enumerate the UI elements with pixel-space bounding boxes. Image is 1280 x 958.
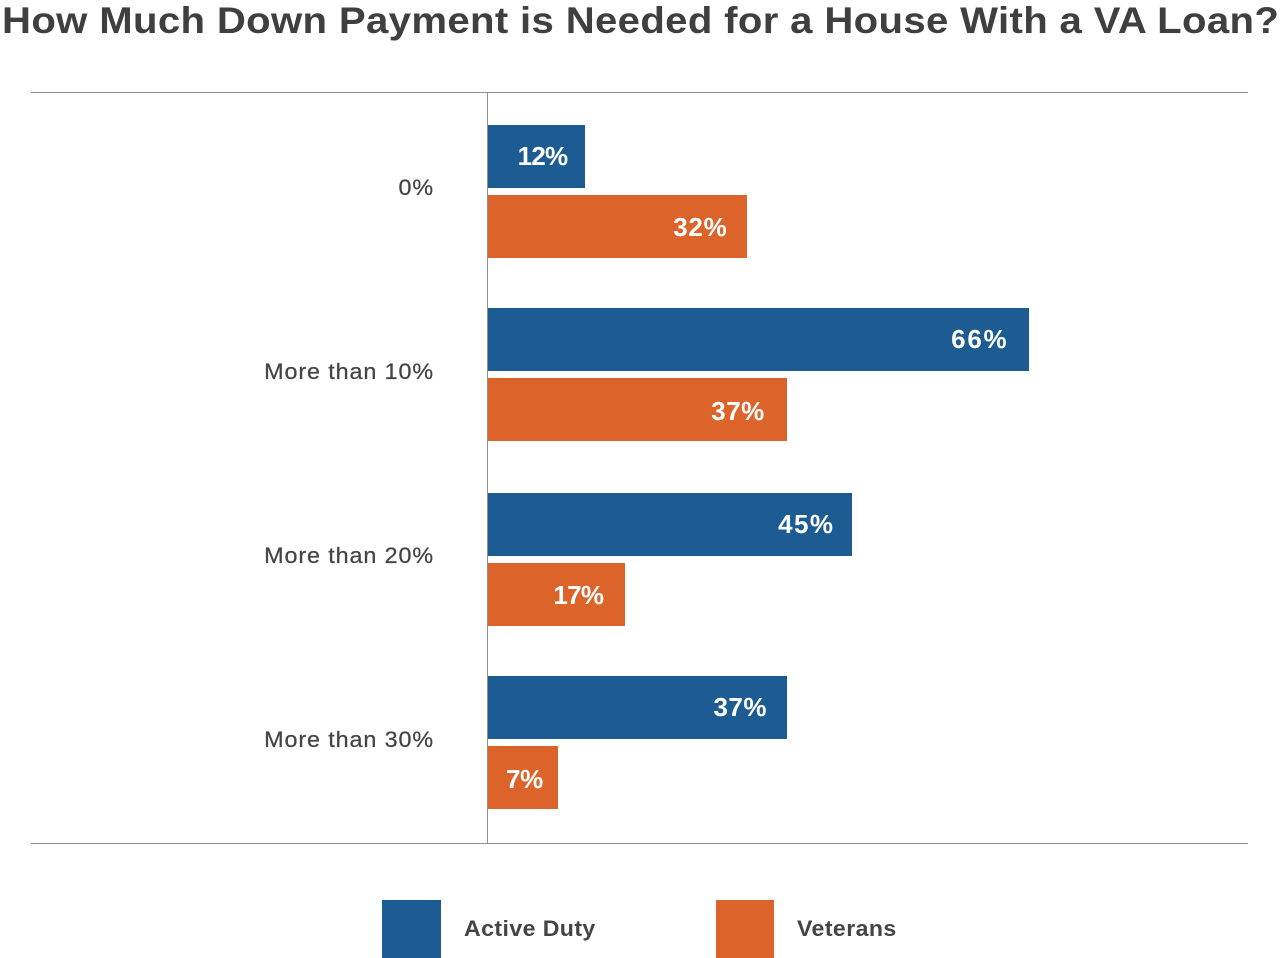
bar: 10% active duty: 66% [951, 324, 1008, 354]
bar: 10% veterans: 37% [711, 396, 765, 426]
bar: 0% active duty [488, 125, 585, 188]
bar: 30% active duty [488, 676, 787, 739]
title: How Much Down Payment is Needed for a House With a VA Loan? [2, 0, 1279, 41]
legend: veterans [716, 900, 897, 958]
category label: more than 10%: More than 10% [264, 359, 434, 384]
legend: active duty [382, 900, 596, 958]
chart [31, 92, 1248, 844]
bar: 10% active duty [488, 308, 1029, 371]
bar: 20% active duty: 45% [778, 509, 834, 539]
bar: 30% veterans [488, 746, 558, 809]
bar: 0% veterans: 32% [673, 212, 727, 242]
bar: 30% veterans: 7% [506, 764, 543, 794]
legend: active duty: Active Duty [464, 916, 596, 941]
bar: 20% veterans: 17% [553, 580, 603, 610]
bar: 20% active duty [488, 493, 852, 556]
bar: 10% veterans [488, 378, 787, 441]
legend: veterans: Veterans [797, 916, 897, 941]
bar: 0% veterans [488, 195, 747, 258]
category label: 0%: 0% [398, 175, 434, 200]
bar: 20% veterans [488, 563, 625, 626]
category label: more than 30%: More than 30% [264, 727, 434, 752]
category label: more than 20%: More than 20% [264, 543, 434, 568]
bar: 30% active duty: 37% [713, 692, 767, 722]
bar: 0% active duty: 12% [518, 141, 567, 171]
